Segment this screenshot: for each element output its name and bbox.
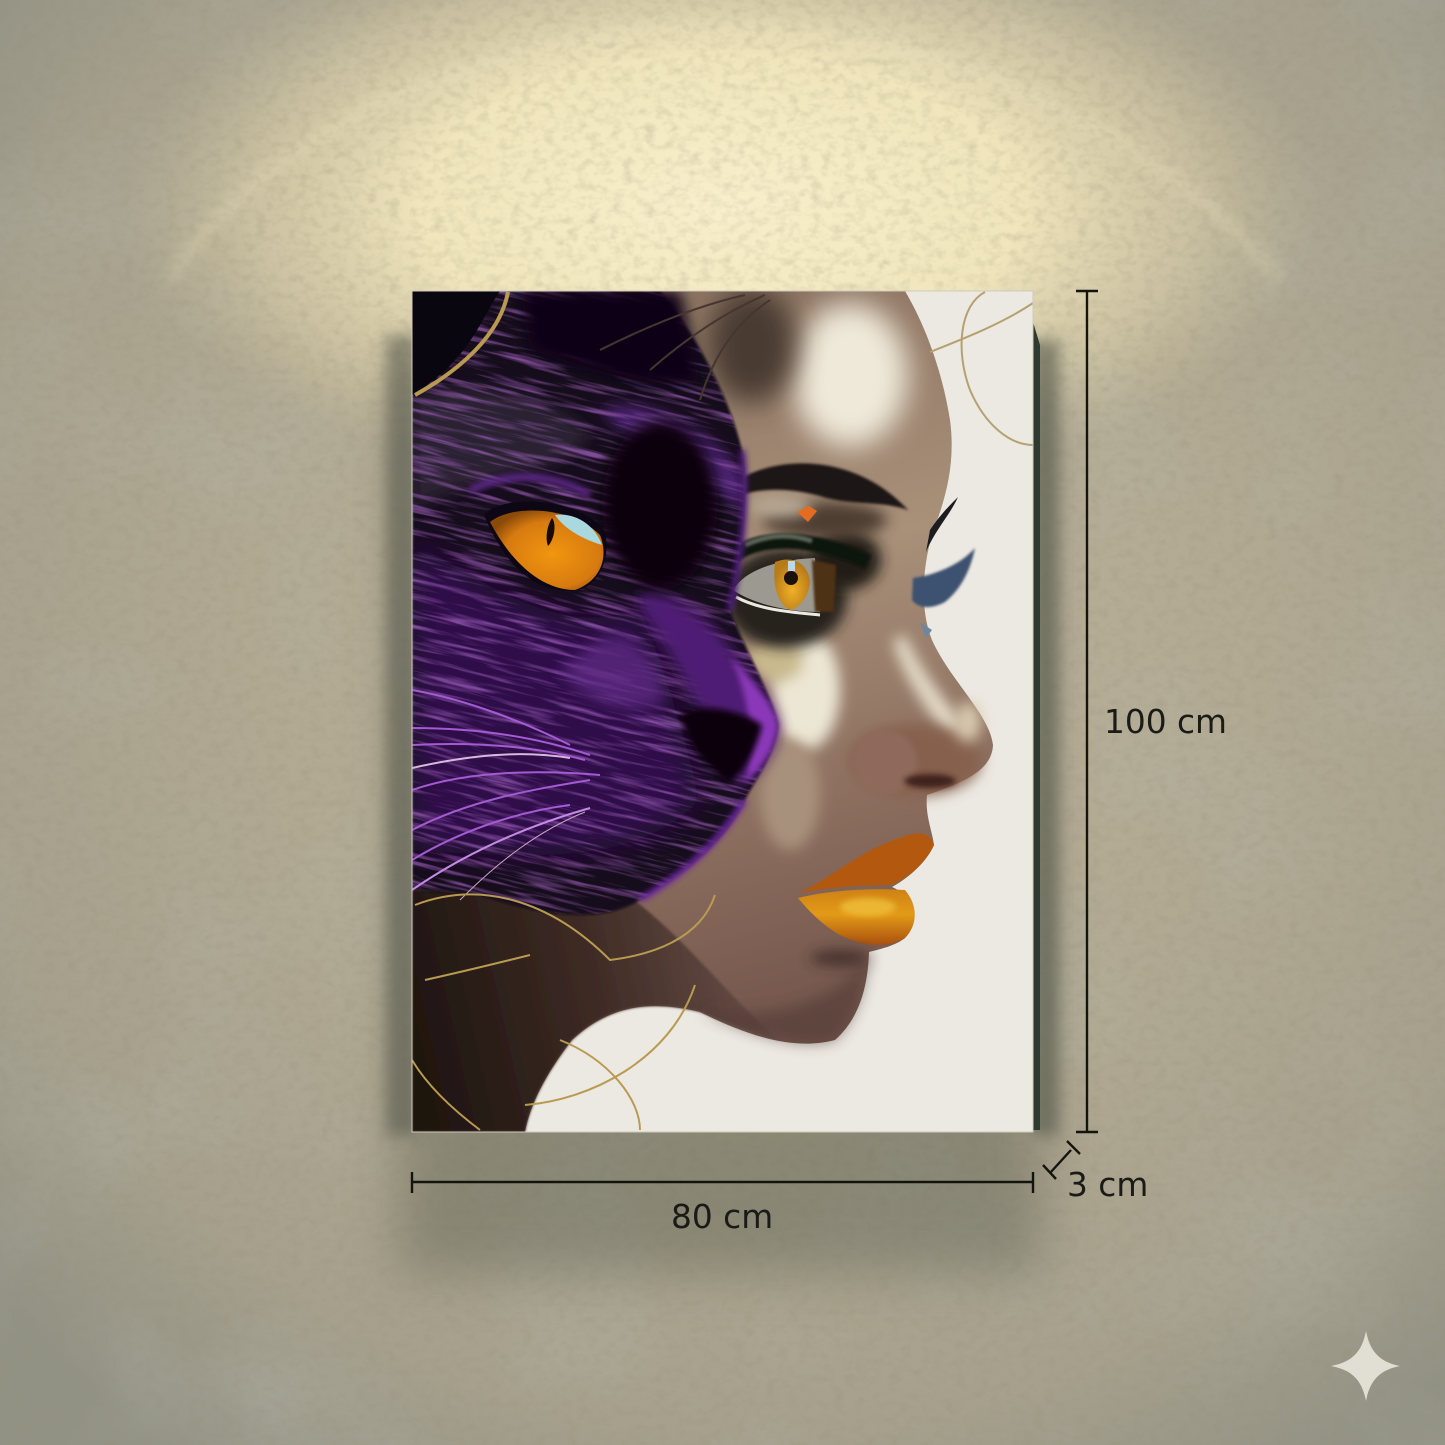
nose [849,635,981,796]
cat fur streaks [412,292,776,915]
whiskers [412,690,600,900]
cheek highlight [772,630,840,750]
height label: 100 cm [1104,703,1227,741]
neck shading [412,890,780,1132]
canvas shadow on wall [386,322,1059,1275]
cat nose [680,708,762,784]
eyebrow [745,463,908,510]
cat eye [484,501,606,591]
far eye lashes [912,497,975,638]
cat muzzle purple [640,590,778,785]
dark brow black patch [602,420,718,590]
lips [798,834,934,965]
eye shadow socket [723,548,847,648]
woman face [412,291,993,1132]
hair wisps at top [600,295,770,400]
width label: 80 cm [671,1198,773,1236]
gold threads [412,292,1033,1130]
height dimension line [1076,291,1098,1132]
eye [733,536,868,615]
canvas edge [412,291,1033,1132]
width dimension line [412,1172,1033,1193]
depth dimension line [1043,1141,1080,1179]
forehead highlight [792,303,908,447]
canvas artwork [350,287,1033,1132]
jaw shadow [700,955,869,1044]
icon: sparkle watermark [1331,1331,1400,1401]
orange fleck [797,506,817,522]
cat face [412,292,789,916]
canvas white background [412,291,1033,1132]
depth label: 3 cm [1067,1166,1148,1204]
